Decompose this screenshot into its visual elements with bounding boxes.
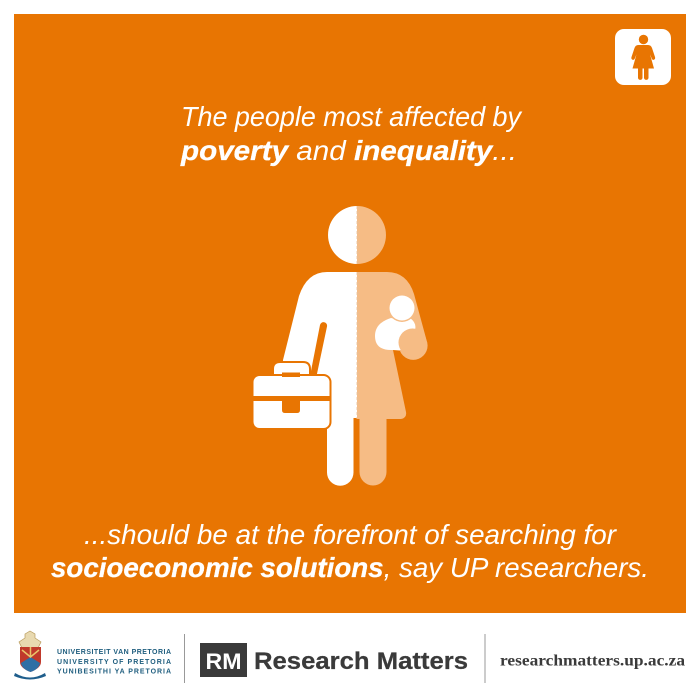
text: university names: UNIVERSITY OF PRETORIA (57, 659, 171, 666)
logo: Research Matters (200, 643, 468, 677)
text: bottom statement (51, 519, 649, 583)
text: university names: YUNIBESITHI YA PRETORIA (57, 668, 171, 676)
figure: light half (356, 206, 428, 486)
heading: top statement: poverty and inequality ... (180, 135, 517, 166)
text: university names (57, 649, 171, 676)
icon: woman badge (615, 29, 671, 85)
heading: top statement: The people most affected by (181, 101, 523, 132)
logo: Research Matters: RM (206, 649, 242, 674)
icon: half woman half mother figure (252, 206, 428, 486)
logo: Research Matters: Research Matters (254, 648, 468, 675)
text: university names: UNIVERSITEIT VAN PRETORIA (57, 649, 171, 656)
figure: white half (283, 206, 357, 486)
heading: top statement (180, 101, 523, 166)
text: website address: researchmatters.up.ac.za (500, 652, 685, 670)
icon: briefcase (252, 362, 330, 429)
logo: University of Pretoria crest (14, 631, 46, 680)
text: bottom statement: ...should be at the forefront of searching for (84, 519, 618, 550)
icon: baby (375, 294, 426, 356)
text: bottom statement: socioeconomic solutions, say UP researchers. (51, 552, 649, 583)
seam (356, 206, 358, 418)
